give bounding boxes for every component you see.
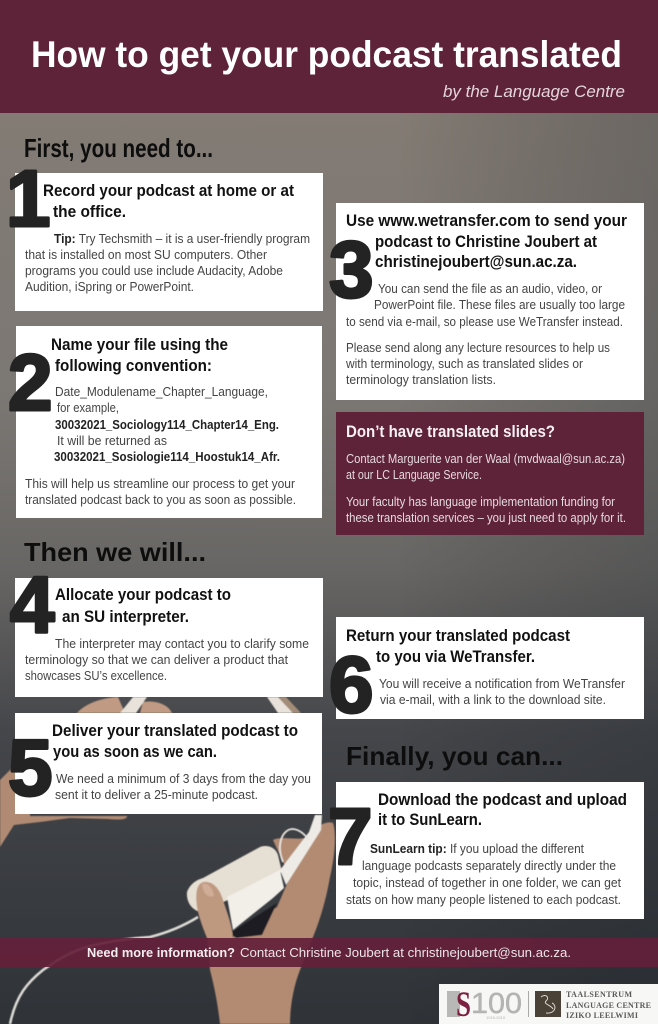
panel: step 1: programs you could use include Audacity, Adobe	[25, 264, 283, 278]
panel: step 6: 6	[329, 640, 374, 729]
heading: then: Then we will...	[24, 537, 206, 567]
panel: step 2: 30032021_Sociology114_Chapter14_Eng.	[55, 418, 279, 432]
panel: translated slides callout: these translation services – you just need to apply for it.	[346, 511, 626, 525]
panel: step 7	[328, 782, 644, 919]
panel: step 4: an SU interpreter.	[62, 608, 189, 626]
panel: step 4: showcases SU’s excellence.	[25, 669, 167, 683]
headband right	[280, 815, 322, 885]
panel: step 3: to send via e-mail, so please use WeTransfer instead.	[346, 315, 623, 329]
panel: step 1: Record your podcast at home or at	[43, 182, 294, 200]
panel: step 6: to you via WeTransfer.	[376, 648, 535, 666]
panel: step 2: 30032021_Sosiologie114_Hoostuk14_Afr.	[54, 450, 280, 464]
panel: step 7: topic, instead of together in one folder, we can get	[353, 876, 622, 890]
panel: translated slides callout: Your faculty has language implementation funding for	[346, 495, 615, 509]
panel: step 7: SunLearn tip: If you upload the different	[370, 842, 584, 856]
panel: step 3: You can send the file as an audio, video, or	[378, 282, 602, 296]
panel: step 7: it to SunLearn.	[378, 811, 482, 829]
logo: S100: S	[456, 984, 471, 1024]
panel: step 3: with terminology, such as translated slides or	[345, 357, 583, 371]
panel: step 1: 1	[6, 154, 50, 243]
logo: language centre emblem	[535, 991, 561, 1017]
panel: step 3: PowerPoint file. These files are usually too large	[374, 298, 625, 312]
panel: step 4: The interpreter may contact you to clarify some	[55, 637, 309, 651]
panel: step 4	[10, 560, 323, 697]
panel: step 2: Date_Modulename_Chapter_Language,	[55, 385, 268, 399]
panel: translated slides callout: Don’t have translated slides?	[346, 423, 555, 441]
headband top	[120, 697, 293, 713]
footer band	[0, 938, 658, 967]
left hand	[0, 765, 127, 847]
panel: step 6: You will receive a notification from WeTransfer	[379, 677, 625, 691]
panel: step 6	[329, 617, 644, 729]
logo: S100: 1919-2019	[486, 1015, 506, 1020]
panel: translated slides callout	[336, 412, 644, 535]
earcup	[187, 846, 282, 912]
footer band: Contact Christine Joubert at christinejoubert@sun.ac.za.	[240, 945, 571, 960]
logo: S100	[447, 984, 529, 1024]
panel: step 2: Name your file using the	[51, 336, 228, 354]
panel: step 1: the office.	[53, 203, 126, 221]
panel: step 4: Allocate your podcast to	[55, 586, 231, 604]
panel: translated slides callout: at our LC Language Service.	[346, 468, 482, 482]
panel: step 5: Deliver your translated podcast to	[52, 722, 298, 740]
panel: step 3: terminology translation lists.	[346, 373, 496, 387]
upper fingers	[77, 697, 172, 713]
panel: step 2: It will be returned as	[57, 434, 167, 448]
thumb	[196, 882, 233, 938]
logo: S100: 100	[471, 988, 522, 1020]
panel: step 7: stats on how many people listened to each podcast.	[346, 893, 621, 907]
panel: step 5: you as soon as we can.	[53, 743, 217, 761]
panel: step 3: podcast to Christine Joubert at	[375, 233, 597, 251]
gap behind hand	[230, 903, 277, 938]
panel: step 3	[329, 203, 644, 400]
heading: finally: Finally, you can...	[346, 741, 563, 771]
panel: step 2: translated podcast back to you as soon as possible.	[25, 493, 296, 507]
panel: step 2	[8, 326, 322, 518]
panel: step 7: Download the podcast and upload	[378, 791, 627, 809]
right hand palm and fingers	[207, 822, 335, 1024]
title: How to get your podcast translated	[31, 34, 622, 75]
panel: translated slides callout: Contact Marguerite van der Waal (mvdwaal@sun.ac.za)	[346, 452, 625, 466]
panel: step 4: terminology so that we can deliver a product that	[25, 653, 289, 667]
panel: step 1: Audition, iSpring or PowerPoint.	[25, 280, 194, 294]
panel: step 7: 7	[328, 792, 372, 881]
heading: first: First, you need to...	[24, 133, 213, 163]
header band	[0, 0, 658, 113]
panel: step 1: Tip: Try Techsmith – it is a user-friendly program	[54, 232, 310, 246]
logo panel	[439, 984, 658, 1024]
panel: step 2: following convention:	[55, 357, 212, 375]
panel: step 3: Use www.wetransfer.com to send your	[346, 212, 628, 230]
panel: step 2: 2	[8, 338, 52, 427]
panel: step 5: sent it to deliver a 25-minute podcast.	[55, 788, 258, 802]
panel: step 3: christinejoubert@sun.ac.za.	[375, 253, 577, 271]
panel: step 6: via e-mail, with a link to the download site.	[380, 693, 606, 707]
logo: language centre wordmark: TAALSENTRUM	[566, 990, 632, 999]
panel: step 1: that is installed on most SU computers. Other	[25, 248, 267, 262]
panel: step 7: language podcasts separately directly under the	[362, 859, 616, 873]
cable loop	[280, 829, 309, 862]
panel: step 5: We need a minimum of 3 days from the day you	[56, 772, 311, 786]
subtitle: by the Language Centre	[443, 83, 625, 101]
logo: language centre wordmark	[566, 990, 651, 1020]
panel: step 2: This will help us streamline our process to get your	[25, 477, 295, 491]
panel: step 2: for example,	[57, 401, 119, 415]
panel: step 3: 3	[329, 225, 374, 314]
panel: step 6: Return your translated podcast	[346, 627, 570, 645]
cable	[10, 917, 198, 1024]
panel: step 5	[8, 713, 322, 814]
panel: step 3: Please send along any lecture resources to help us	[346, 341, 610, 355]
footer band: Need more information?	[87, 945, 235, 960]
logo: language centre wordmark: LANGUAGE CENTRE	[566, 1001, 651, 1010]
photo: hands holding headphones	[0, 697, 335, 1024]
panel: step 5: 5	[8, 723, 52, 812]
panel: step 1	[6, 154, 323, 311]
panel: step 4: 4	[10, 560, 55, 649]
thumbnail	[202, 884, 214, 896]
logo: language centre wordmark: IZIKO LEELWIMI	[566, 1011, 638, 1020]
